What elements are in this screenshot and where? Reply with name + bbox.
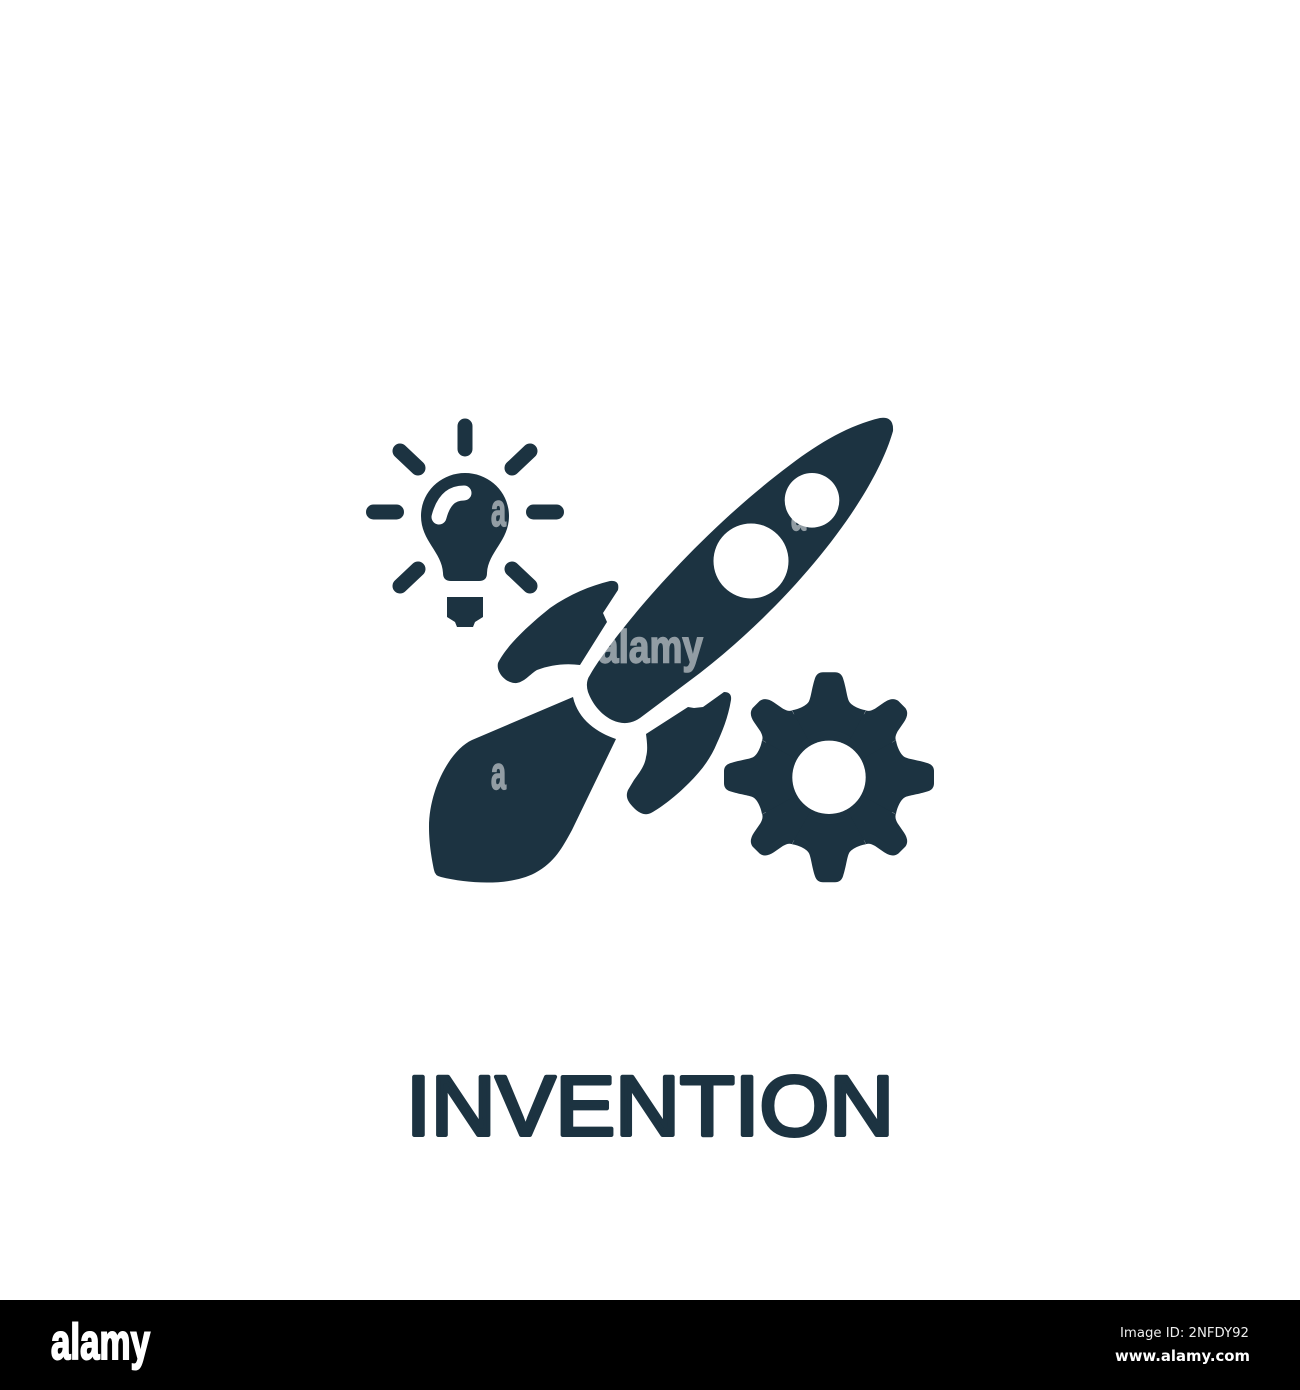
bulb base	[447, 597, 483, 627]
bulb rays	[374, 426, 556, 586]
left fin	[498, 581, 618, 683]
footer logo: alamy	[51, 1314, 150, 1370]
website: www.alamy.com	[1115, 1347, 1250, 1365]
footer bar	[0, 1300, 1300, 1390]
right fin	[627, 692, 731, 814]
watermark: a	[491, 484, 506, 536]
watermark: alamy	[598, 620, 703, 672]
rocket exhaust flame	[429, 697, 616, 883]
watermark: a	[791, 488, 806, 540]
image id: Image ID: 2NFDY92	[1120, 1326, 1249, 1341]
watermark: a	[491, 747, 506, 799]
icon: light bulb with rays	[374, 426, 556, 627]
rocket body with windows	[587, 418, 893, 723]
title: INVENTION	[406, 1059, 894, 1153]
bulb glass	[421, 473, 509, 581]
icon: gear	[724, 672, 934, 882]
watermark	[491, 484, 806, 799]
icon: rocket	[429, 418, 893, 883]
bulb highlight	[439, 493, 464, 517]
